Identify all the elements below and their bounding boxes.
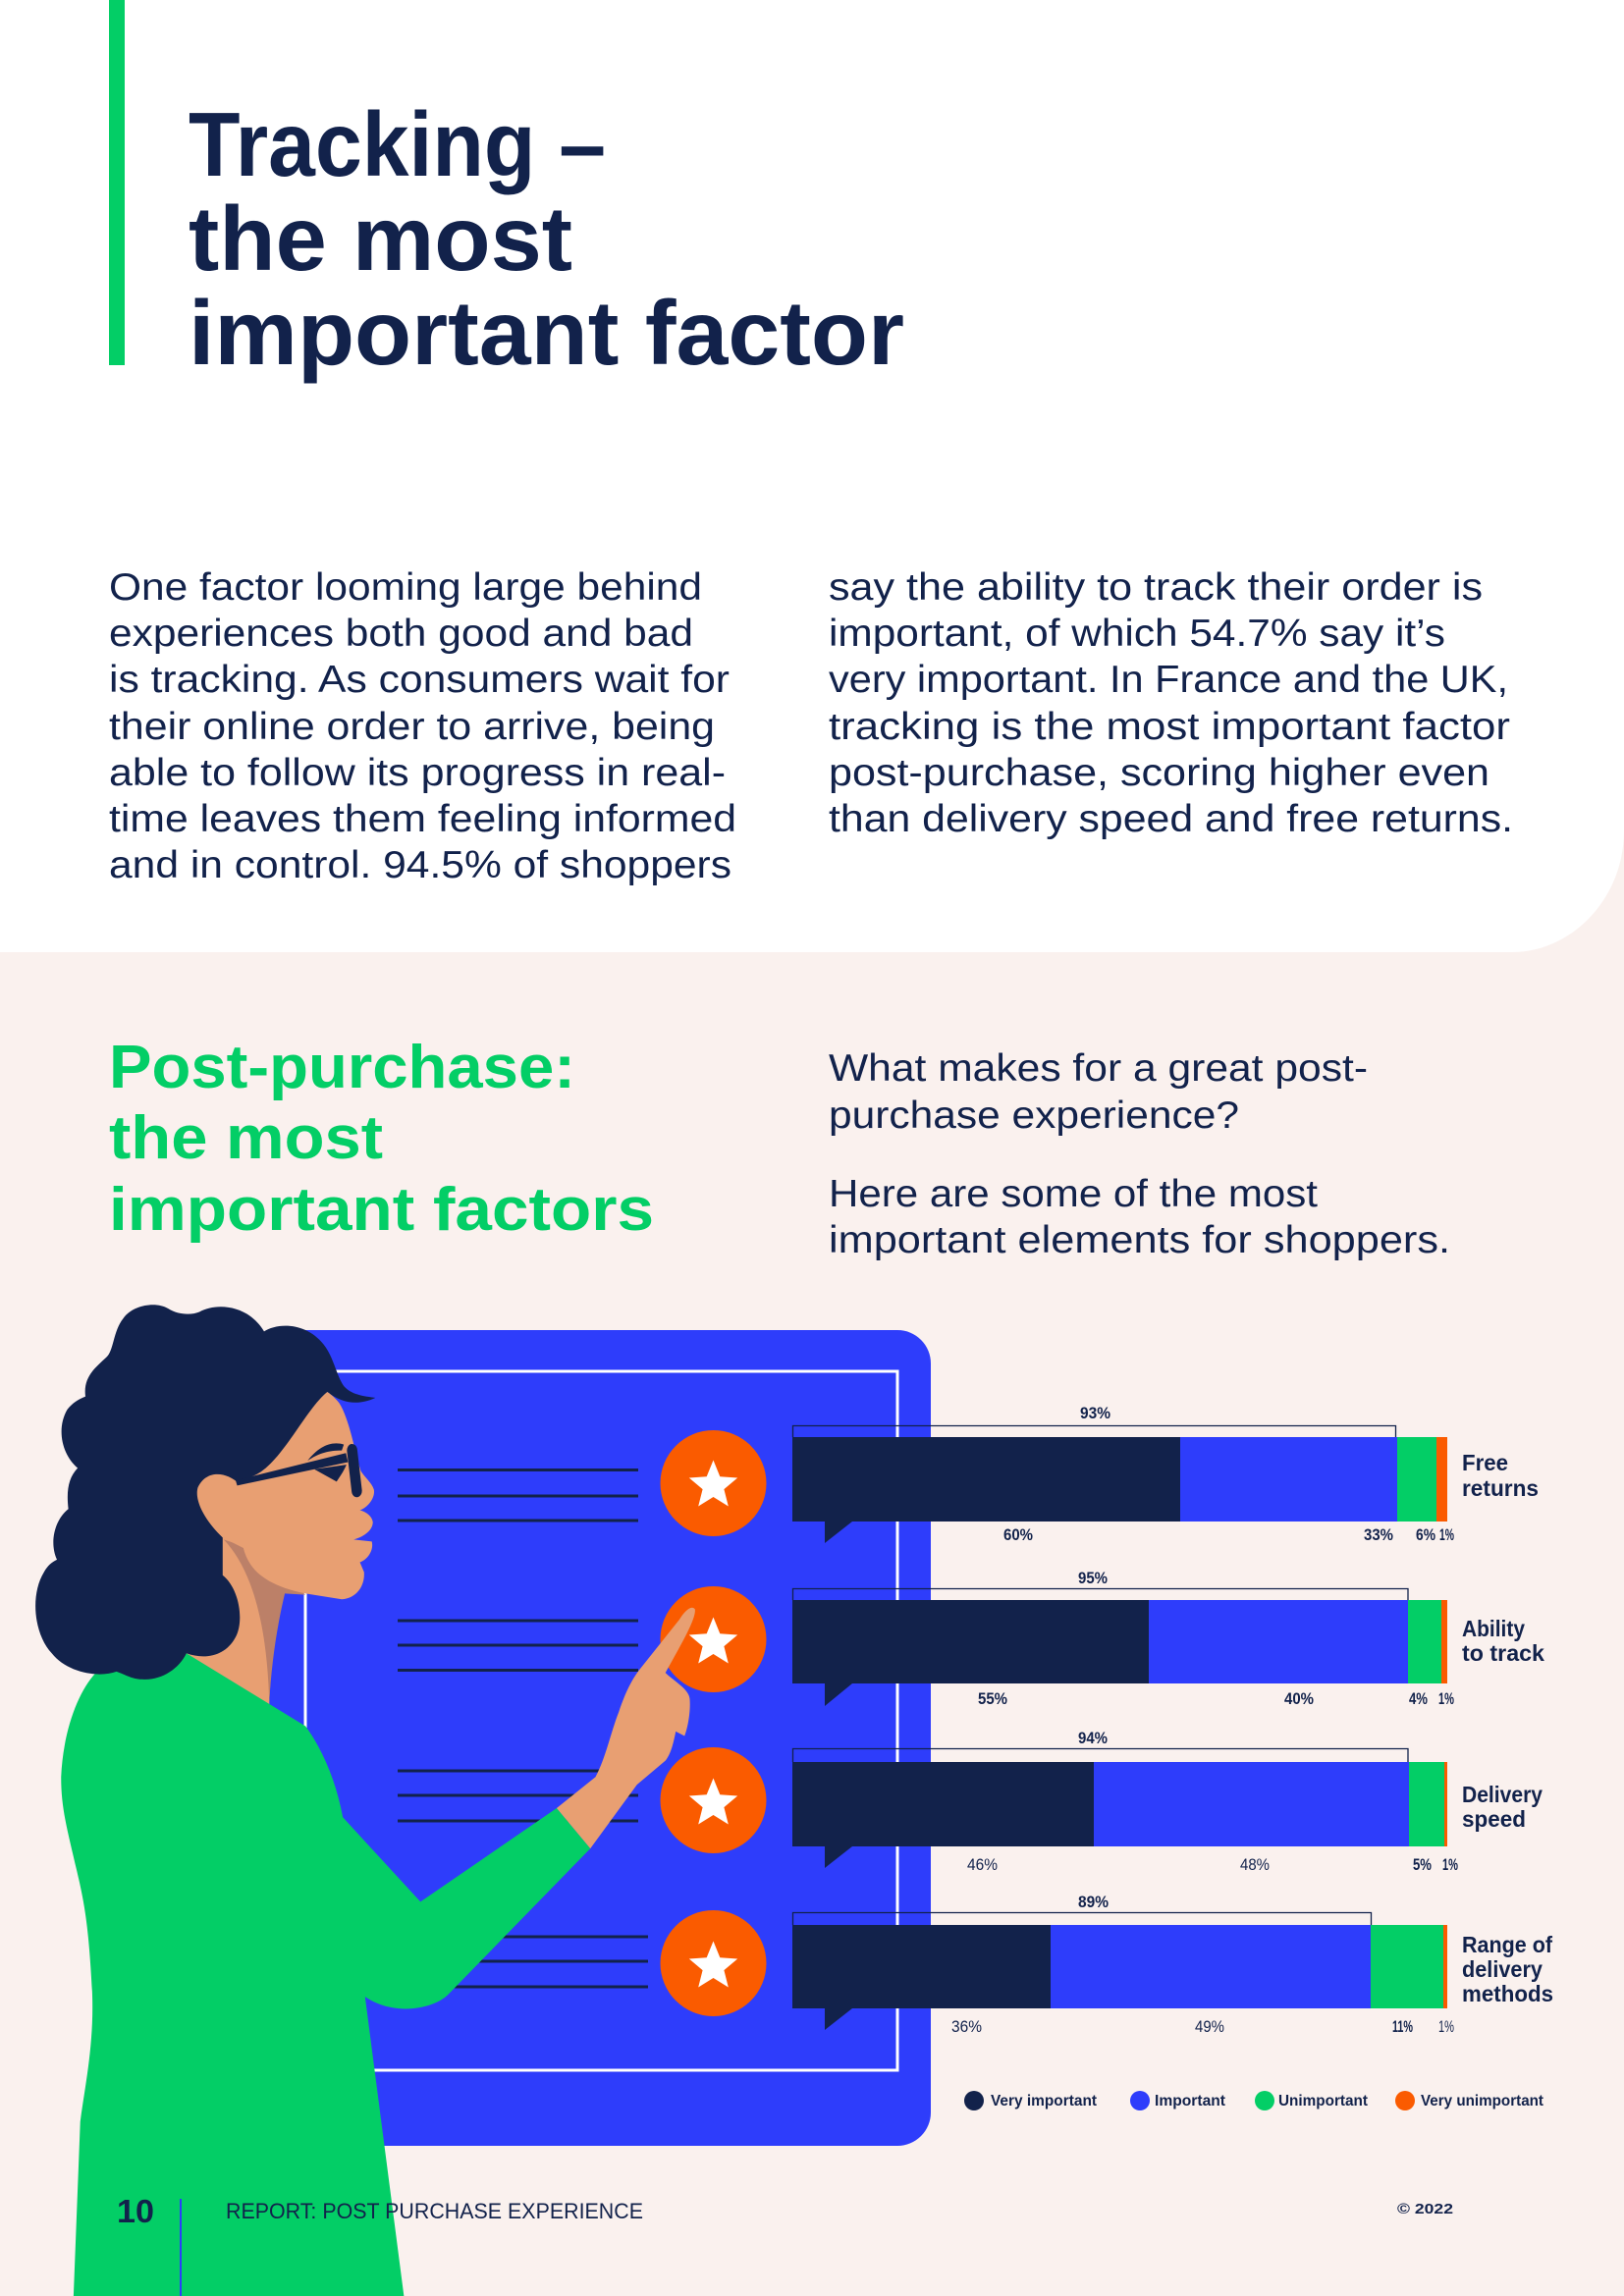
icon: star badge 2 (660, 1586, 766, 1692)
text block: section intro: What makes for a great post- (829, 1047, 1368, 1090)
footer: 10 (117, 2193, 154, 2229)
bar row: free returns (792, 1404, 1539, 1544)
panel: white top section (0, 0, 1624, 952)
title (189, 93, 904, 384)
text block: intro left column: is tracking. As consumers wait for (109, 659, 730, 701)
bar row: delivery speed: speed (1462, 1806, 1526, 1832)
text block: intro left column: their online order to arrive, being (109, 706, 715, 748)
bar row: range of delivery methods: 36% (951, 2017, 982, 2036)
footer (117, 2193, 1453, 2296)
bar row: range of delivery methods: delivery (1462, 1956, 1543, 1982)
bar row: delivery speed: 1% (1442, 1855, 1458, 1874)
illustration: woman pointing at list (35, 1305, 695, 2296)
section heading (109, 1034, 654, 1244)
text block: intro right column: tracking is the most important factor (829, 706, 1510, 748)
bar row: ability to track (792, 1569, 1544, 1708)
text block: intro left column: One factor looming large behind (109, 566, 702, 609)
text block: intro right column: post-purchase, scoring higher even (829, 752, 1489, 794)
legend (964, 2091, 1543, 2110)
bar row: range of delivery methods (792, 1893, 1553, 2036)
bar row: ability to track: 95% (1078, 1569, 1108, 1587)
bar row: ability to track: 1% (1438, 1689, 1454, 1708)
section heading: Post-purchase: (109, 1034, 575, 1101)
star badges (660, 1430, 766, 2016)
icon: star badge 1 (660, 1430, 766, 1536)
title: Tracking – (189, 93, 606, 195)
panel: blue document board (245, 1330, 931, 2146)
bar row: range of delivery methods: 49% (1195, 2017, 1224, 2036)
bar row: free returns: 33% (1364, 1525, 1393, 1544)
bar row: range of delivery methods: 11% (1392, 2017, 1413, 2036)
bar row: free returns: Free (1462, 1450, 1508, 1475)
bar row: ability to track: 40% (1284, 1689, 1314, 1708)
text block: intro left column: able to follow its progress in real- (109, 752, 726, 794)
legend: Very important (991, 2093, 1097, 2109)
bar row: range of delivery methods: 1% (1438, 2017, 1454, 2036)
icon: star badge 3 (660, 1747, 766, 1853)
text block: section intro: important elements for shoppers. (829, 1219, 1450, 1261)
text block: intro right column: say the ability to track their order is (829, 566, 1483, 609)
legend: Important (1155, 2093, 1225, 2109)
bar row: free returns: 60% (1003, 1525, 1033, 1544)
green accent bar (109, 0, 125, 365)
text block: intro left column: and in control. 94.5% of shoppers (109, 844, 731, 886)
bar row: ability to track: Ability (1462, 1616, 1525, 1641)
text block: intro right column: than delivery speed and free returns. (829, 798, 1513, 840)
bar row: delivery speed: 94% (1078, 1729, 1108, 1747)
bar row: delivery speed: Delivery (1462, 1782, 1543, 1807)
text block: intro right column (829, 566, 1513, 840)
bar row: delivery speed: 48% (1240, 1855, 1270, 1874)
chart: importance stacked bars (792, 1404, 1553, 2036)
text block: intro right column: very important. In France and the UK, (829, 659, 1508, 701)
title: the most (189, 187, 572, 290)
legend: Very unimportant (1421, 2093, 1543, 2109)
footer: REPORT: POST PURCHASE EXPERIENCE (226, 2199, 643, 2223)
bar row: range of delivery methods: 89% (1078, 1893, 1109, 1911)
bar row: delivery speed (792, 1729, 1543, 1874)
text block: intro left column: experiences both good and bad (109, 613, 693, 655)
section heading: the most (109, 1104, 383, 1172)
text block: section intro (829, 1047, 1450, 1261)
text block: intro left column (109, 566, 736, 886)
bar row: free returns: returns (1462, 1475, 1539, 1501)
text block: intro right column: important, of which 54.7% say it’s (829, 613, 1445, 655)
text block: section intro: purchase experience? (829, 1095, 1239, 1137)
footer: © 2022 (1397, 2201, 1453, 2217)
text block: intro left column: time leaves them feeling informed (109, 798, 736, 840)
bar row: ability to track: 4% (1409, 1689, 1428, 1708)
bar row: free returns: 1% (1439, 1525, 1454, 1544)
bar row: ability to track: 55% (978, 1689, 1007, 1708)
bar row: free returns: 93% (1080, 1404, 1110, 1422)
bar row: range of delivery methods: Range of (1462, 1932, 1552, 1957)
bar row: delivery speed: 5% (1413, 1855, 1432, 1874)
title: important factor (189, 282, 904, 384)
bar row: delivery speed: 46% (967, 1855, 998, 1874)
legend: Unimportant (1278, 2093, 1368, 2109)
bar row: free returns: 6% (1416, 1525, 1435, 1544)
document text lines (398, 1470, 648, 1987)
bar row: range of delivery methods: methods (1462, 1981, 1553, 2006)
bar row: ability to track: to track (1462, 1640, 1544, 1666)
section heading: important factors (109, 1176, 654, 1244)
text block: section intro: Here are some of the most (829, 1173, 1318, 1215)
icon: star badge 4 (660, 1910, 766, 2016)
